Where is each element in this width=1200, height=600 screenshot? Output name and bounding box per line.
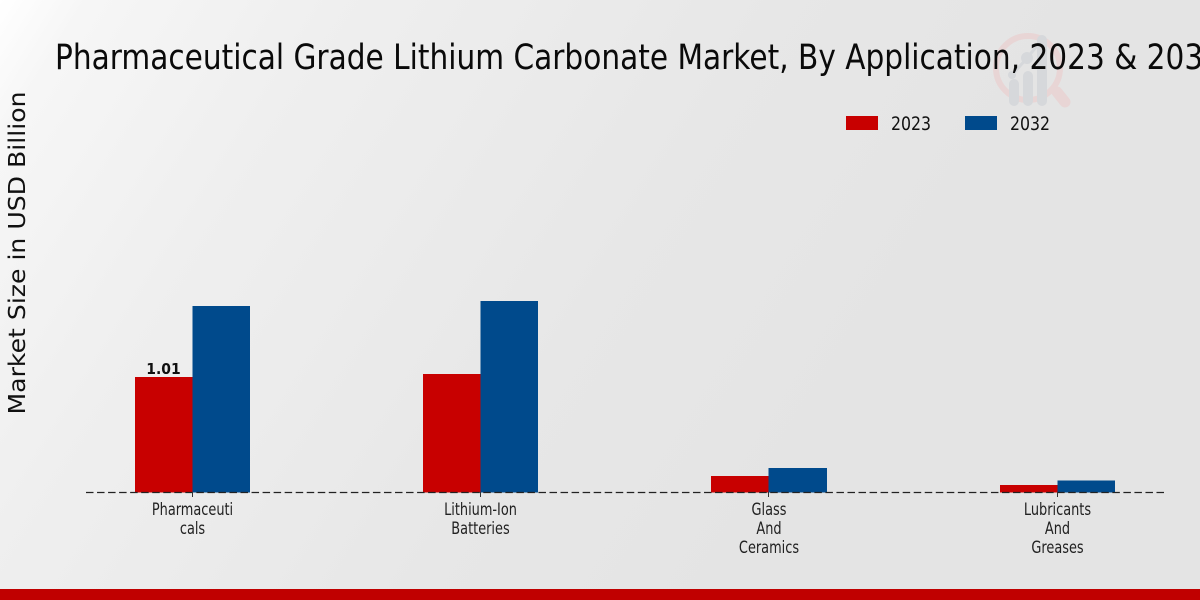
x axis label: Lithium-Ion Batteries — [444, 499, 517, 539]
axis ticks — [192, 492, 1058, 497]
bar chart — [86, 301, 1164, 497]
x axis label: Glass And Ceramics: Glass — [752, 499, 787, 520]
x axis label: Lubricants And Greases: Lubricants — [1024, 499, 1091, 520]
legend item: 2023 — [846, 114, 931, 135]
legend item: 2023: 2023 — [891, 114, 931, 135]
x axis label: Glass And Ceramics: And — [756, 518, 782, 539]
value label: 1.01: 1.01 — [146, 360, 181, 378]
x axis baseline — [86, 492, 1164, 494]
x axis label: Glass And Ceramics — [739, 499, 799, 558]
x axis label: Lubricants And Greases: And — [1045, 518, 1070, 539]
bars: Lithium-Ion Batteries — [423, 301, 538, 492]
footer bar — [0, 589, 1200, 600]
bars: Glass And Ceramics — [711, 468, 827, 492]
x axis label: Pharmaceuticals: cals — [180, 518, 205, 539]
legend item: 2032: 2032 — [1010, 114, 1050, 135]
x axis label: Pharmaceuticals: Pharmaceuti — [152, 499, 233, 520]
x axis label: Pharmaceuticals — [152, 499, 233, 539]
legend — [846, 114, 1050, 135]
x axis label: Lubricants And Greases — [1024, 499, 1091, 558]
bars: Pharmaceuticals — [135, 306, 250, 492]
y axis label: Market Size in USD Billion — [5, 92, 31, 414]
bars: Lubricants And Greases — [1000, 480, 1115, 492]
x axis label: Lithium-Ion Batteries: Lithium-Ion — [444, 499, 517, 520]
icon: watermark magnifier logo — [996, 36, 1065, 102]
title: Pharmaceutical Grade Lithium Carbonate Market, By Application, 2023 & 2032 — [55, 37, 1200, 78]
legend item: 2032 — [965, 114, 1050, 135]
x axis label: Lubricants And Greases: Greases — [1031, 537, 1084, 558]
x axis label: Glass And Ceramics: Ceramics — [739, 537, 799, 558]
x axis label: Lithium-Ion Batteries: Batteries — [451, 518, 510, 539]
